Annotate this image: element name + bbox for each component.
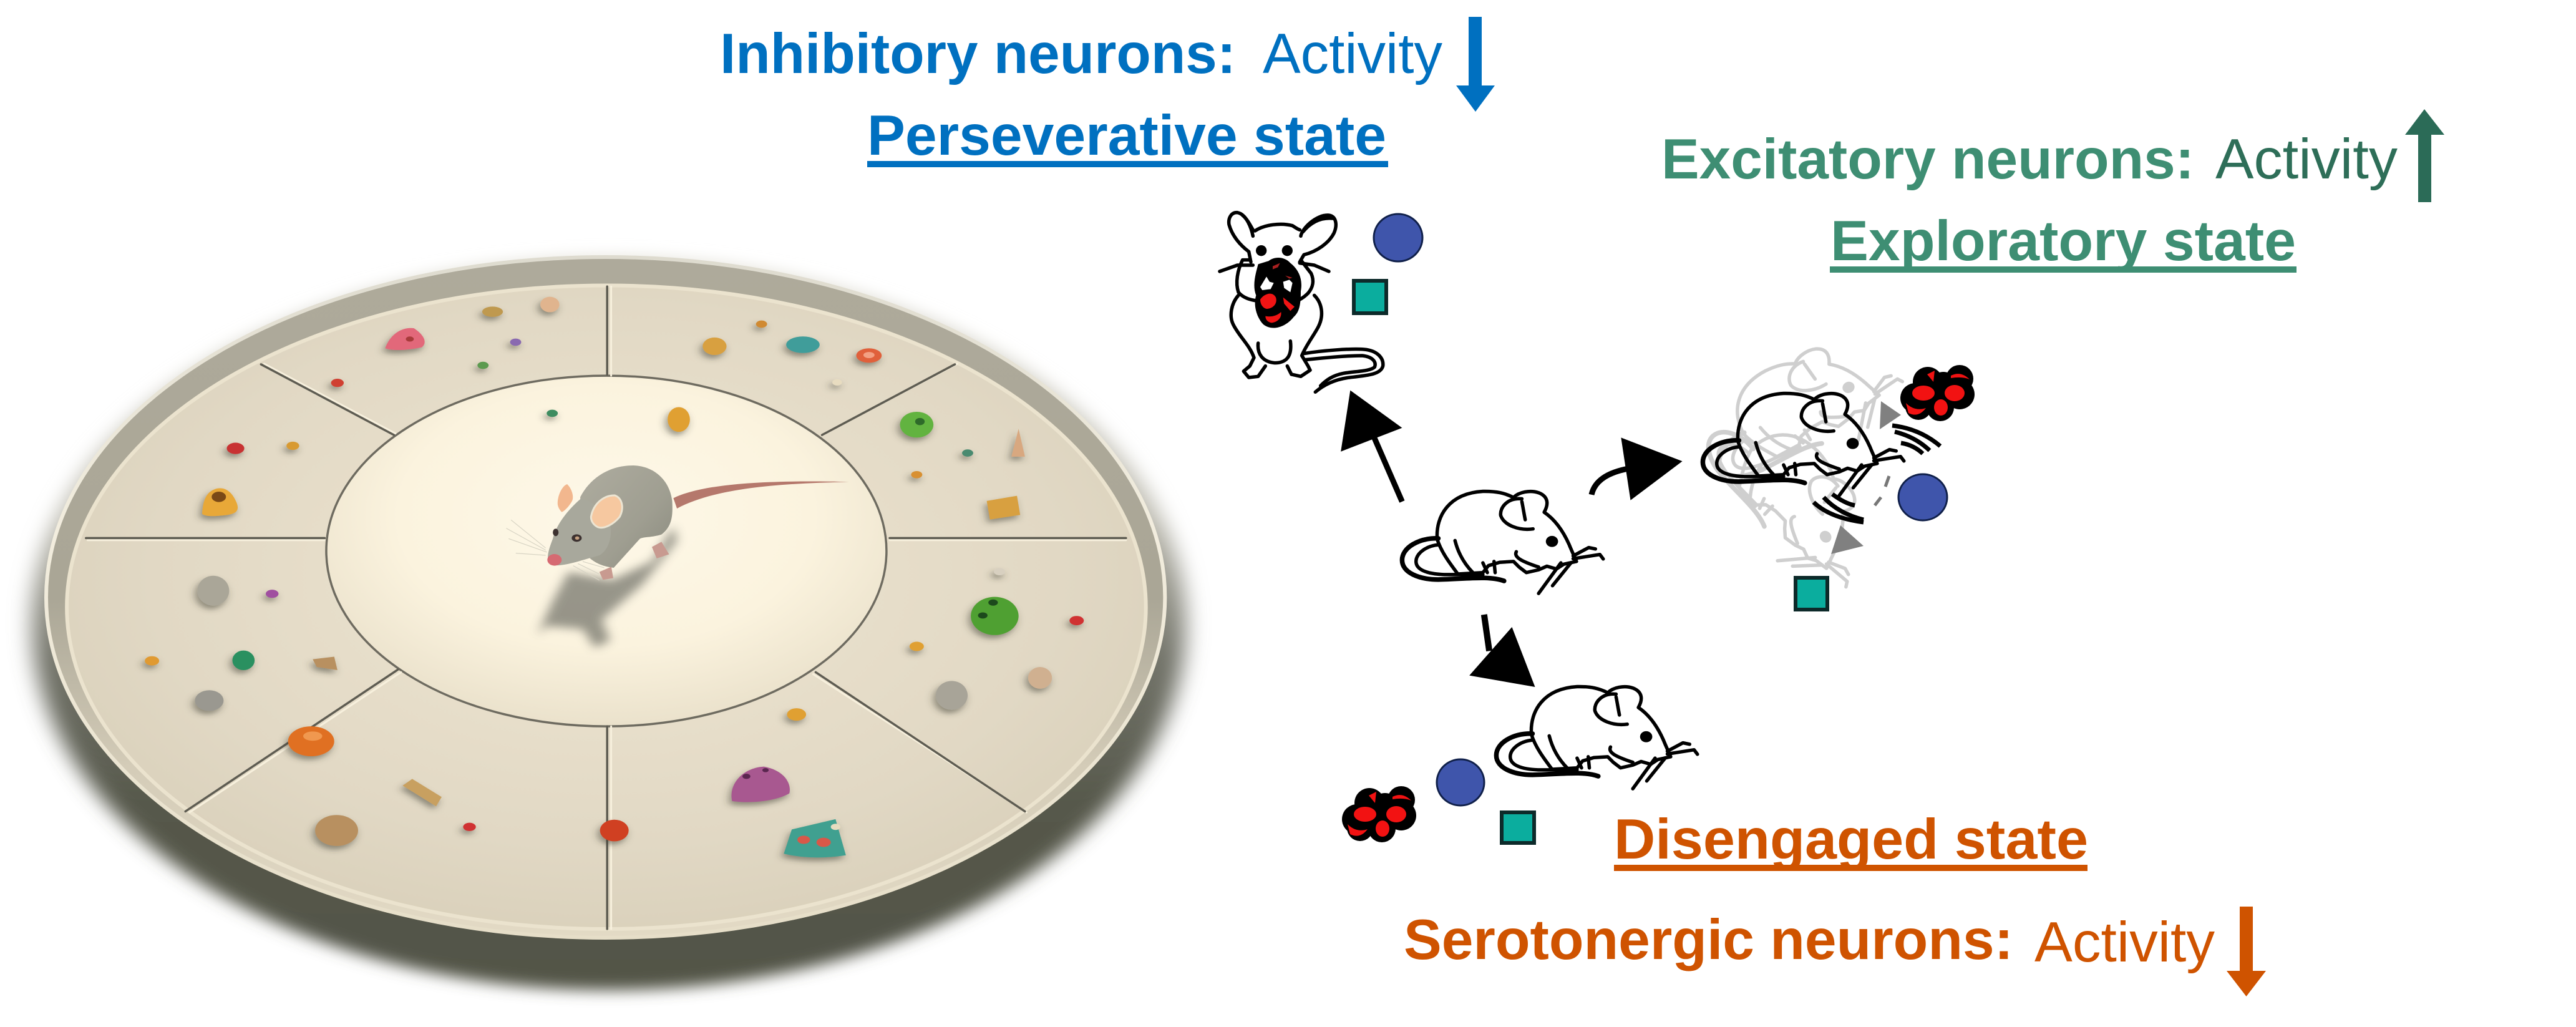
heading: serotonergic neurons activity: Serotonergic neurons:: [1404, 908, 2013, 971]
scattered objects: [145, 297, 1084, 857]
solid exploring mouse: [1703, 393, 1904, 495]
mouse tail: [673, 482, 849, 509]
arrow: to perseverative state: [1341, 391, 1402, 502]
mouse whiskers: [506, 520, 604, 580]
sniff waves: [1814, 426, 1940, 522]
heading: disengaged state: Disengaged state: [1614, 808, 2088, 871]
blue circle object: perseverative: [1374, 214, 1422, 261]
mouse eyes: [1256, 245, 1293, 256]
ghost mouse: downward scan: [1688, 391, 1897, 610]
panel: circular arena illustration: [32, 256, 1185, 990]
dashed gaze line: [1875, 476, 1889, 505]
teal square object: exploratory: [1796, 578, 1827, 610]
mouse ears: [558, 484, 622, 528]
mouse eyes and nose: [547, 528, 581, 566]
heading: excitatory neurons activity: Activity: [2215, 128, 2398, 191]
mouse cast shadow: [537, 526, 677, 648]
arena rim and wall: [46, 257, 1165, 938]
heading: excitatory neurons activity: Excitatory neurons:: [1661, 128, 2194, 191]
heading: serotonergic neurons activity: Activity: [2034, 911, 2215, 974]
heading: inhibitory neurons activity: Activity: [1263, 22, 1442, 85]
grey direction markers: [1831, 401, 1901, 554]
arrow: inhibitory activity down: [1456, 17, 1495, 112]
food cluster: disengaged: [1342, 786, 1416, 842]
front-facing mouse: [1220, 213, 1336, 377]
arena floor: [67, 285, 1146, 929]
arrow: to exploratory state: [1592, 437, 1683, 500]
mouse head: [548, 499, 611, 565]
arrow: excitatory activity up: [2405, 109, 2444, 202]
mouse tail: [1304, 349, 1383, 392]
heading: inhibitory neurons activity: Inhibitory neurons:: [720, 22, 1236, 85]
arena divider spokes: [86, 286, 1126, 929]
central mouse icon: [1402, 491, 1603, 593]
teal square object: disengaged: [1502, 812, 1534, 843]
mouse feet: [600, 542, 669, 580]
perseverative mouse with food: [1220, 213, 1383, 392]
blue circle object: disengaged: [1437, 759, 1484, 806]
food held at mouth: [1254, 258, 1301, 328]
food cluster: exploratory: [1900, 365, 1975, 421]
heading: perseverative state: Perseverative state: [867, 104, 1386, 167]
exploratory mouse with ghost positions: [1688, 320, 1940, 610]
heading: exploratory state: Exploratory state: [1830, 210, 2296, 273]
arrow: to disengaged state: [1469, 615, 1535, 687]
blue circle object: exploratory: [1898, 474, 1947, 520]
disengaged mouse icon: [1496, 686, 1698, 789]
mouse body: [580, 465, 673, 568]
arena drop shadow: [32, 256, 1185, 990]
realistic mouse in arena centre: [506, 465, 849, 648]
teal square object: perseverative: [1354, 281, 1386, 313]
central zone: [326, 376, 887, 726]
ghost mouse: upward scan: [1691, 320, 1917, 498]
arrow: serotonergic activity down: [2227, 907, 2266, 996]
